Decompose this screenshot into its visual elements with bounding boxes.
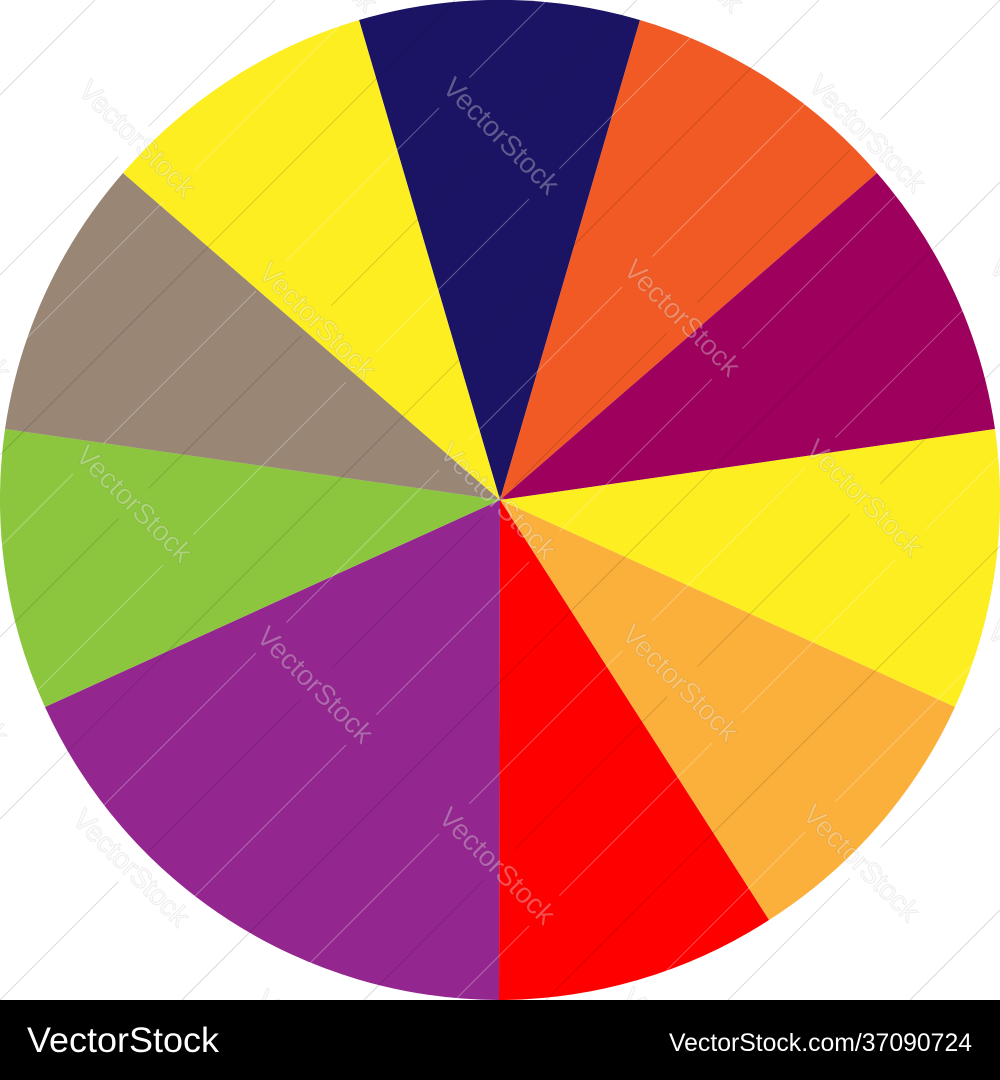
slice: red bbox=[499, 500, 769, 1000]
watermark text: VectorStock bbox=[251, 620, 381, 750]
slice: orange bbox=[500, 20, 877, 500]
slice: green bbox=[0, 429, 500, 707]
slice: yellow left bbox=[123, 20, 500, 500]
footer image id text: VectorStock.com/37090724 bbox=[669, 1030, 972, 1057]
watermark text: VectorStock bbox=[434, 436, 564, 566]
slice: light orange bbox=[500, 500, 955, 920]
watermark text: VectorStock bbox=[797, 798, 927, 928]
slice: navy bbox=[359, 0, 640, 500]
watermark text: VectorStock bbox=[800, 433, 930, 563]
watermark text: VectorStock bbox=[73, 74, 203, 204]
watermark text: VectorStock bbox=[433, 801, 563, 931]
slice: purple bbox=[45, 500, 500, 1000]
footer bar bbox=[0, 1000, 1000, 1080]
slice: taupe bbox=[5, 173, 500, 500]
watermark text: VectorStock bbox=[253, 256, 383, 386]
footer logo text: VectorStock bbox=[27, 1021, 220, 1060]
slice: yellow right bbox=[500, 429, 1000, 707]
watermark text: VectorStock bbox=[618, 253, 748, 383]
watermark text: VectorStock bbox=[437, 71, 567, 201]
watermark text: VectorStock bbox=[616, 618, 746, 748]
slice: maroon bbox=[500, 173, 995, 500]
watermark text: VectorStock bbox=[70, 439, 200, 569]
watermark fragment above footer: V bbox=[615, 981, 651, 1017]
watermark fragment above footer: V bbox=[249, 983, 285, 1019]
watermark text: VectorStock bbox=[803, 69, 933, 199]
watermark text: VectorStock bbox=[67, 803, 197, 933]
